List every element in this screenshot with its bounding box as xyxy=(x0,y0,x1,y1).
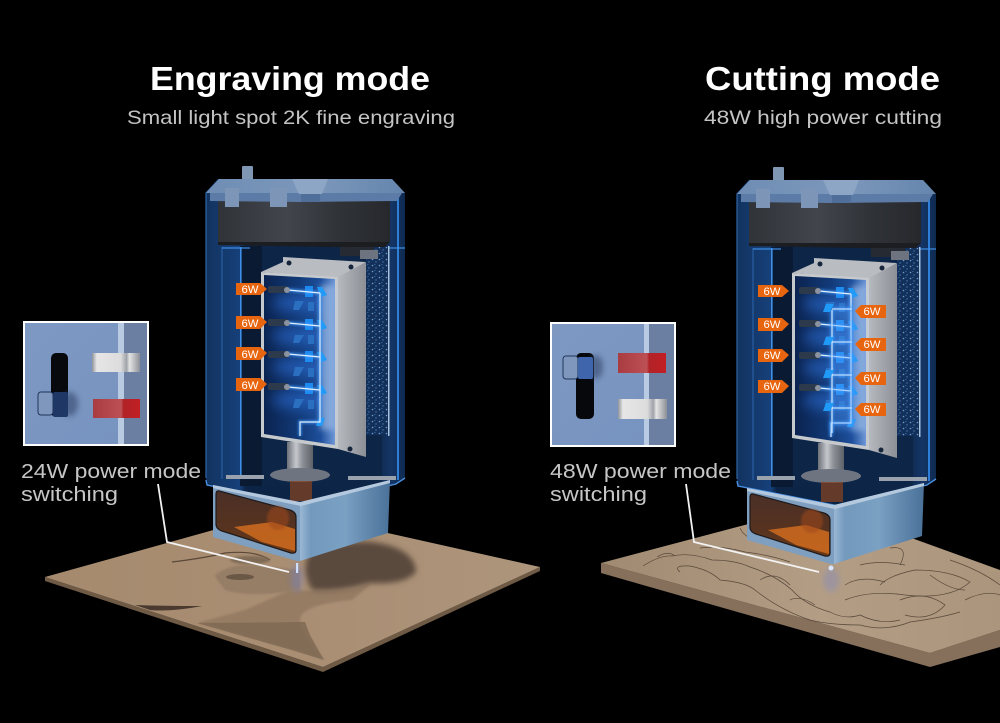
top cap xyxy=(206,166,405,207)
white indicator xyxy=(92,353,140,372)
red indicator xyxy=(618,353,666,373)
laser spot xyxy=(291,563,303,592)
leader line: engraving xyxy=(158,484,289,572)
engraved portrait xyxy=(135,542,416,660)
extra beams xyxy=(823,304,856,433)
subtitle: cutting: 48W high power cutting xyxy=(704,107,942,129)
device: cutting xyxy=(737,167,936,592)
heat sink with laser array xyxy=(261,257,366,457)
tag 6W: 6W xyxy=(242,318,259,330)
circuit board xyxy=(340,246,390,436)
panel: 24W switch inset xyxy=(24,322,148,445)
tag 6W: 6W xyxy=(764,319,781,331)
leader line: cutting xyxy=(686,484,819,572)
device case xyxy=(206,179,405,505)
panel: cutting board xyxy=(601,505,1000,667)
circuit board xyxy=(871,247,920,437)
panel: engraving board xyxy=(45,510,540,672)
caption: 48W power mode switching xyxy=(550,461,731,506)
shaft xyxy=(757,443,927,502)
device case xyxy=(737,180,936,506)
tag 6W: 6W xyxy=(864,373,881,385)
tag 6W: 6W xyxy=(864,404,881,416)
cooling fan xyxy=(749,201,921,248)
caption: 24W power mode switching: 24W power mode xyxy=(21,461,201,483)
top cap xyxy=(737,167,936,208)
title: Cutting mode: Cutting mode xyxy=(705,60,940,97)
tag 6W: 6W xyxy=(242,284,259,296)
cooling fan xyxy=(218,200,390,247)
panel: 48W switch inset xyxy=(551,323,675,446)
switch knob xyxy=(38,392,78,417)
red indicator xyxy=(93,399,140,418)
caption: 48W power mode switching: switching xyxy=(550,484,647,506)
tag 6W: 6W xyxy=(764,381,781,393)
cut puzzle lines xyxy=(643,528,1000,628)
tag 6W: 6W xyxy=(864,306,881,318)
switch knob xyxy=(563,355,603,379)
title: Engraving mode: Engraving mode xyxy=(150,60,430,97)
tag 6W: 6W xyxy=(242,380,259,392)
laser spot xyxy=(823,566,839,592)
tag 6W: 6W xyxy=(764,286,781,298)
power tags: engraving xyxy=(236,283,267,392)
caption: 24W power mode switching xyxy=(21,461,201,506)
tag 6W: 6W xyxy=(242,349,259,361)
laser head xyxy=(213,480,390,561)
tag 6W: 6W xyxy=(864,339,881,351)
white indicator xyxy=(618,399,667,419)
shaft xyxy=(226,442,396,501)
switch slot xyxy=(51,353,68,417)
power tags: cutting xyxy=(758,285,886,416)
caption: 24W power mode switching: switching xyxy=(21,484,118,506)
tag 6W: 6W xyxy=(764,350,781,362)
subtitle: engraving: Small light spot 2K fine engraving xyxy=(127,107,455,129)
switch slot xyxy=(576,353,594,419)
laser head xyxy=(747,483,924,564)
heat sink with laser array xyxy=(792,258,897,458)
caption: 48W power mode switching: 48W power mode xyxy=(550,461,731,483)
device: engraving xyxy=(206,166,405,592)
